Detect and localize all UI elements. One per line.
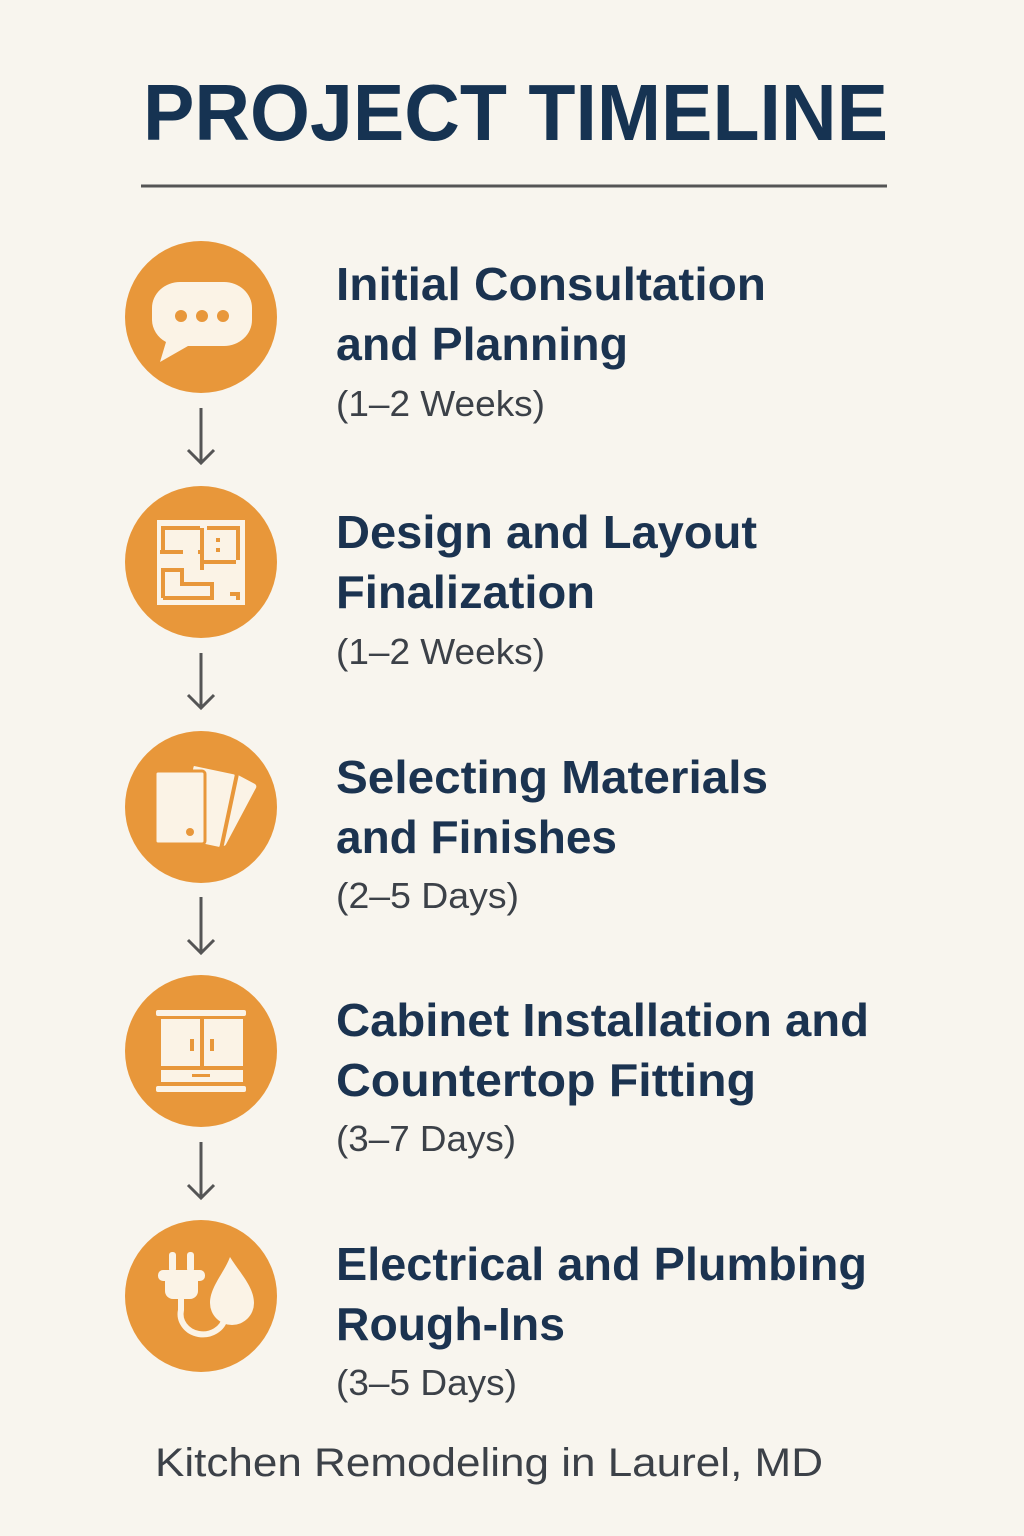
step 3 text: Selecting Materials [336, 751, 768, 803]
icon: sample cards [125, 731, 277, 883]
icon: floor plan [125, 486, 277, 638]
step 4 text [336, 994, 869, 1159]
step 5 text: Rough-Ins [336, 1298, 565, 1350]
step 4 text: (3–7 Days) [336, 1118, 516, 1159]
step 4 text: Cabinet Installation and [336, 994, 869, 1046]
step 3: materials [125, 731, 768, 916]
footer: Kitchen Remodeling in Laurel, MD [155, 1441, 823, 1485]
arrow 2 [188, 653, 214, 708]
step 1: consultation [125, 241, 766, 424]
icon: chat bubble [125, 241, 277, 393]
step 4 text: Countertop Fitting [336, 1054, 756, 1106]
step 2: design [125, 486, 757, 672]
arrow 4 [188, 1142, 214, 1198]
step 5 text [336, 1238, 867, 1403]
step 1 text: Initial Consultation [336, 258, 766, 310]
step 2 text [336, 506, 757, 672]
icon: cabinet [125, 975, 277, 1127]
step 3 text [336, 751, 768, 916]
arrow 1 [188, 408, 214, 463]
step 5: electrical & plumbing [125, 1220, 867, 1403]
step 5 text: (3–5 Days) [336, 1362, 517, 1403]
arrow 3 [188, 897, 214, 953]
step 4: cabinet [125, 975, 869, 1159]
step 2 text: Design and Layout [336, 506, 757, 558]
step 1 text: (1–2 Weeks) [336, 383, 545, 424]
step 2 text: (1–2 Weeks) [336, 631, 545, 672]
step 2 text: Finalization [336, 566, 595, 618]
step 3 text: and Finishes [336, 811, 617, 863]
step 5 text: Electrical and Plumbing [336, 1238, 867, 1290]
step 3 text: (2–5 Days) [336, 875, 519, 916]
icon: plug and drop [125, 1220, 277, 1372]
step 1 text [336, 258, 766, 424]
title: PROJECT TIMELINE [143, 68, 888, 157]
step 1 text: and Planning [336, 318, 628, 370]
